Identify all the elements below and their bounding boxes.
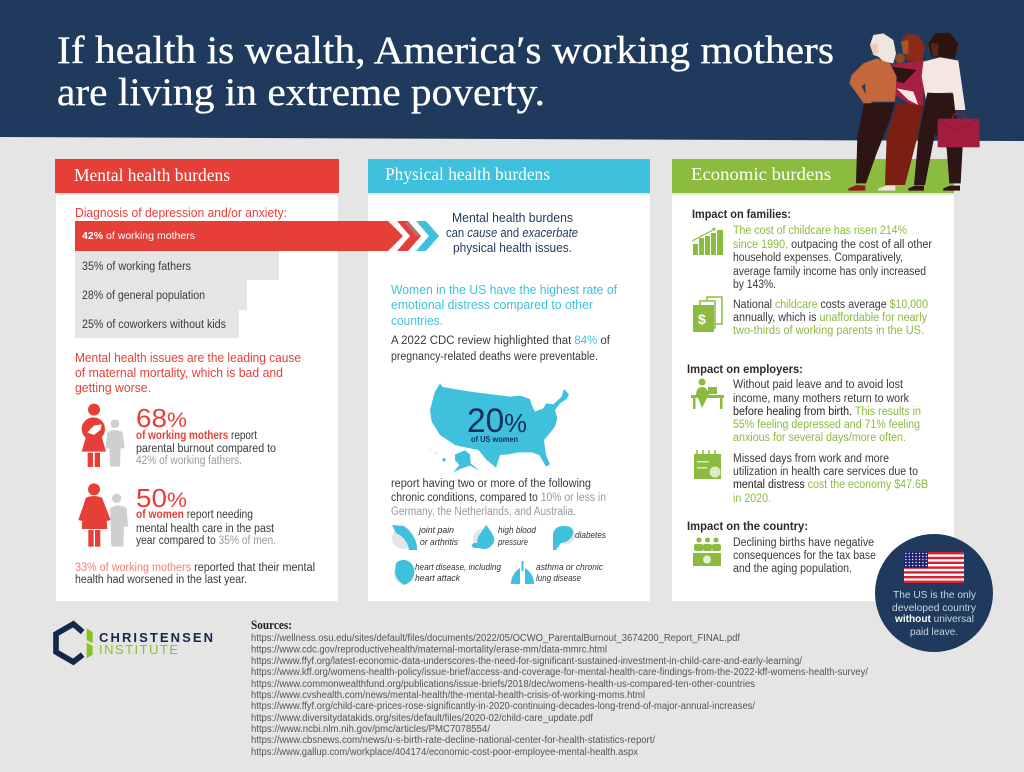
label: joint pain: [417, 525, 458, 548]
icon: lungs: [511, 561, 534, 584]
title: are living in extreme poverty.: [57, 71, 545, 114]
bar chart: other diagnosis rates: [75, 251, 279, 338]
sources list: https://www.gallup.com/workplace/404174/economic-cost-poor-employee-mental-health.aspx: [251, 747, 638, 758]
left woman: [848, 33, 897, 191]
icon: calendar: [694, 450, 721, 479]
text: burdens link: Mental health burdens: [452, 211, 573, 225]
text: emotional distress: emotional distress compared to other: [391, 298, 593, 312]
arrow: 42% bar crossing into the physical panel, with chevrons: [75, 221, 439, 251]
text: chronic conditions: chronic conditions, compared to 10% or less in: [391, 492, 606, 504]
text: declining births: Declining births have negative: [733, 537, 874, 549]
text: 33% of working mothers: health had worsened in the last year.: [75, 574, 247, 586]
arrow: 42% bar crossing into the physical panel, with chevrons: 42% of working mothers: [82, 230, 195, 242]
stat: 50%: mental health care in the past: [136, 523, 275, 535]
text: childcare cost: average family income has only increased: [733, 266, 926, 278]
sources list: https://wellness.osu.edu/sites/default/files/documents/2022/05/OCWO_ParentalBurnout_3674200_Report_FINAL.pdf: [251, 633, 740, 644]
callout: US paid leave: The US is the only: [893, 590, 977, 601]
text: declining births: consequences for the tax base: [733, 550, 876, 562]
icon: joint pain: [392, 525, 417, 550]
stat: 50%: 50%: [136, 483, 187, 513]
icon: woman and man: [78, 483, 128, 547]
sources list: https://www.cbsnews.com/news/u-s-birth-rate-decline-national-center-for-health-statistics-report/: [251, 735, 655, 746]
icon: mother holding baby and father: [82, 404, 125, 467]
icon: rising bar chart: [692, 228, 723, 255]
panel: mental health burdens: [55, 159, 339, 601]
subheading: families: Impact on families:: [692, 207, 791, 221]
callout: US paid leave: [875, 534, 993, 652]
icon: money stack: $: [698, 311, 706, 327]
text: CDC review: [391, 335, 611, 363]
text: CDC review: A 2022 CDC review highlighted that 84% of: [391, 335, 611, 347]
text: 33% of working mothers: [75, 562, 315, 586]
label: high blood pressure: high blood: [498, 525, 537, 536]
icon: US flag: [904, 552, 964, 583]
label: diabetes: diabetes: [575, 530, 606, 541]
icon: money stack: [693, 297, 722, 332]
label: asthma or lung disease: lung disease: [536, 573, 581, 584]
label: joint pain: or arthritis: [420, 537, 458, 548]
text: missed days: utilization in health care services due to: [733, 466, 918, 478]
heading: mental health burdens: [55, 159, 339, 193]
label: asthma or lung disease: asthma or chronic: [536, 562, 603, 573]
text: CDC review: pregnancy-related deaths were preventable.: [391, 351, 598, 363]
text: emotional distress: Women in the US have the highest rate of: [391, 283, 618, 297]
text: childcare cost: The cost of childcare has risen 214%: [733, 225, 907, 237]
sources list: https://www.ffyf.org/child-care-prices-rose-significantly-in-2020-continuing-decades-long-trend-of-major-annual-increases/: [251, 701, 755, 712]
sources list: https://www.diversitydatakids.org/sites/default/files/2020-02/child-care_update.pdf: [251, 713, 593, 724]
icon: heart disease: [394, 560, 414, 585]
stat: 68%: 42% of working fathers.: [136, 455, 242, 467]
sources list: https://www.ncbi.nlm.nih.gov/pmc/articles/PMC7078554/: [251, 724, 490, 735]
sources list: https://www.kff.org/womens-health-policy/issue-brief/access-and-coverage-for-mental-health-care-findings-from-the-2022-kff-womens-health-survey/: [251, 667, 868, 678]
map: United States with 20%: 20%: [467, 402, 527, 440]
text: missed days: in 2020.: [733, 493, 771, 505]
stat: 68%: of working mothers report: [136, 430, 258, 442]
text: paid leave: before healing from birth. This results in: [733, 406, 921, 418]
sources list: https://www.cvshealth.com/news/mental-health/the-mental-health-crisis-of-working-moms.html: [251, 690, 645, 701]
text: chronic conditions: Germany, the Netherlands, and Australia.: [391, 506, 576, 518]
text: 33% of working mothers: 33% of working mothers reported that their mental: [75, 562, 315, 574]
text: national childcare: National childcare costs average $10,000: [733, 299, 928, 311]
right woman: [908, 33, 965, 191]
illustration: three women: [848, 33, 980, 191]
subheading: employers: Impact on employers:: [687, 362, 803, 376]
text: paid leave: 55% feeling depressed and 71% feeling: [733, 419, 920, 431]
sources list: https://www.ffyf.org/latest-economic-data-underscores-the-need-for-significant-sustained-investment-in-child-care-and-early-learning/: [251, 656, 802, 667]
briefcase: [938, 113, 980, 147]
heading: economic burdens: [672, 159, 954, 193]
text: national childcare: annually, which is unaffordable for nearly: [733, 312, 927, 324]
label: heart disease: heart disease, including: [415, 562, 502, 573]
text: childcare cost: by 143%.: [733, 279, 776, 291]
sources list: [251, 618, 868, 758]
bar chart: other diagnosis rates: 28% of general population: [82, 290, 205, 302]
logo: Christensen Institute: [56, 624, 213, 662]
text: emotional distress: countries.: [391, 314, 443, 328]
text: burdens link: physical health issues.: [453, 241, 572, 255]
stat: 50%: of women report needing: [136, 509, 253, 521]
middle woman: [878, 34, 925, 191]
logo: Christensen Institute: CHRISTENSEN: [99, 630, 213, 645]
label: asthma or lung disease: [536, 562, 603, 584]
heading: mental health burdens: Mental health burdens: [74, 165, 230, 185]
text: paid leave: [733, 379, 921, 444]
text: paid leave: income, many mothers return to work: [733, 393, 909, 405]
text: missed days: [733, 453, 928, 505]
panel: economic burdens: [672, 159, 954, 601]
stat: 68%: 68%: [136, 403, 187, 433]
bar chart: other diagnosis rates: 25% of coworkers without kids: [82, 319, 226, 331]
heading: physical health burdens: [368, 159, 650, 193]
map: United States with 20%: of US women: [471, 434, 518, 444]
text: maternal mortality: getting worse.: [75, 381, 151, 395]
text: national childcare: [733, 299, 928, 337]
text: emotional distress: [391, 283, 618, 328]
text: burdens link: [446, 211, 578, 255]
callout: US paid leave: developed country: [892, 603, 977, 614]
text: diagnosis heading: Diagnosis of depression and/or anxiety:: [75, 206, 287, 220]
text: maternal mortality: [75, 351, 301, 395]
text: childcare cost: [733, 225, 932, 291]
label: heart disease: [415, 562, 502, 584]
stat: 50%: [136, 483, 276, 547]
bar chart: other diagnosis rates: 35% of working fathers: [82, 261, 191, 273]
sources list: https://www.cdc.gov/reproductivehealth/maternal-mortality/erase-mm/data-mmrc.html: [251, 644, 607, 656]
sources list: https://www.commonwealthfund.org/publications/issue-briefs/2018/dec/womens-health-us-compared-ten-other-countries: [251, 679, 755, 690]
callout: US paid leave: without universal: [894, 614, 974, 625]
header banner: [0, 0, 1024, 141]
text: maternal mortality: of maternal mortality, which is bad and: [75, 366, 283, 380]
text: paid leave: Without paid leave and to avoid lost: [733, 379, 904, 391]
panel: physical health burdens: [368, 159, 650, 601]
stat: 68%: parental burnout compared to: [136, 443, 276, 455]
icon: high blood pressure: [472, 525, 494, 549]
text: childcare cost: household expenses. Comparatively,: [733, 252, 903, 264]
label: high blood pressure: [497, 525, 537, 548]
text: burdens link: can cause and exacerbate: [446, 226, 578, 240]
icon: diabetes: [553, 526, 575, 550]
text: childcare cost: since 1990, outpacing the cost of all other: [733, 239, 932, 251]
text: chronic conditions: [391, 478, 606, 518]
heading: economic burdens: Economic burdens: [691, 164, 831, 184]
text: national childcare: two-thirds of working parents in the US.: [733, 325, 924, 337]
logo: Christensen Institute: INSTITUTE: [99, 642, 178, 657]
sources list: Sources:: [251, 618, 292, 632]
text: missed days: Missed days from work and more: [733, 453, 889, 465]
icon: people and money: [693, 538, 721, 566]
callout: US paid leave: paid leave.: [910, 627, 958, 638]
text: declining births: [733, 537, 876, 575]
title: If health is wealth, America′s working mothers: [57, 29, 834, 72]
icon: person at desk: [691, 378, 724, 409]
label: high blood pressure: pressure: [497, 537, 528, 548]
text: missed days: mental distress cost the economy $47.6B: [733, 479, 928, 491]
text: paid leave: anxious for several days/more often.: [733, 432, 906, 444]
stat: 50%: year compared to 35% of men.: [136, 535, 276, 547]
heading: physical health burdens: Physical health burdens: [385, 164, 550, 184]
subheading: country: Impact on the country:: [687, 519, 808, 533]
stat: 68%: [136, 403, 276, 467]
text: declining births: and the aging population.: [733, 563, 852, 575]
label: joint pain: joint pain: [417, 525, 454, 536]
map: United States with 20%: [429, 383, 569, 472]
text: chronic conditions: report having two or more of the following: [391, 478, 591, 490]
text: maternal mortality: Mental health issues are the leading cause: [75, 351, 301, 365]
label: heart disease: heart attack: [415, 573, 461, 584]
title: [57, 29, 834, 114]
